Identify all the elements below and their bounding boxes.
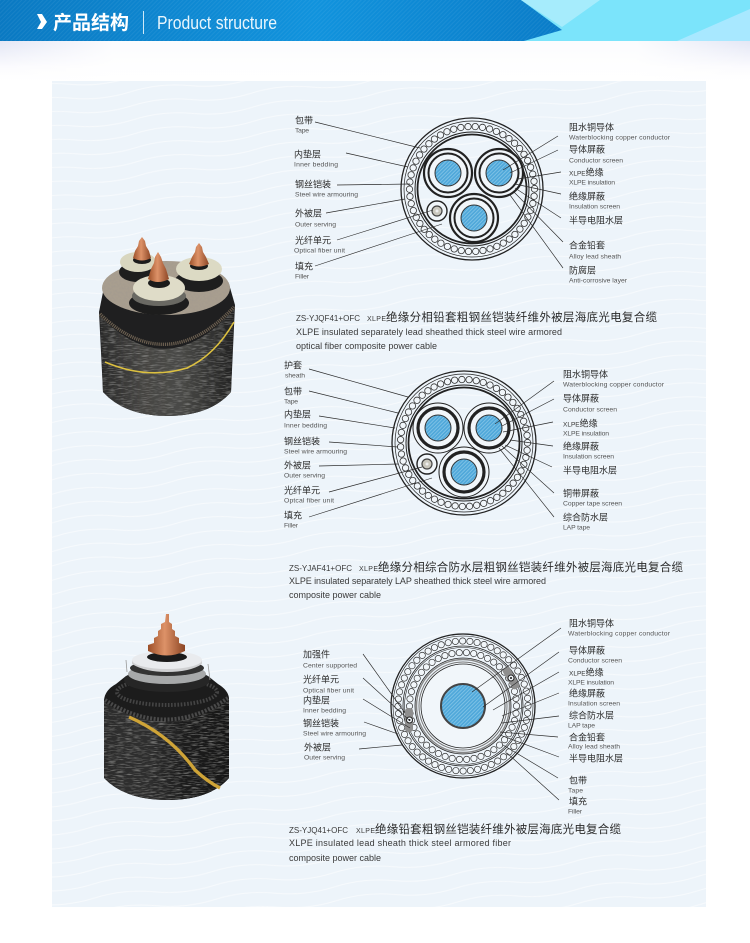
- header banner: [0, 0, 750, 41]
- diagram 3 caption: XLPE: [356, 828, 375, 835]
- heading: Chinese: 产品结构: [53, 12, 129, 34]
- diagram 2 left labels: 内垫层: [284, 408, 311, 420]
- diagram 3 left labels: 加强件: [303, 648, 330, 660]
- diagram 3 leader lines: [359, 628, 561, 800]
- diagram 2 left labels: 钢丝铠装: [284, 436, 320, 446]
- diagram 1 right labels: 半导电阻水层: [569, 214, 623, 226]
- diagram 1 left labels: 内垫层: [294, 148, 321, 160]
- diagram 2 caption: ZS-YJAF41+OFC: [289, 564, 352, 573]
- diagram 2 left labels: [284, 360, 347, 530]
- diagram 1 right labels: Anti-corrosive layer: [569, 278, 628, 284]
- diagram 1 right labels: XLPE insulation: [569, 180, 615, 186]
- diagram 3 left labels: Center supported: [303, 662, 357, 670]
- diagram 3 right labels: Conductor screen: [568, 658, 622, 664]
- diagram 1 left labels: Outer serving: [295, 222, 336, 228]
- diagram 3 left labels: [303, 648, 366, 762]
- copper conductor: [148, 614, 185, 656]
- diagram 1 right labels: 绝缘屏蔽: [569, 190, 605, 202]
- optical fiber unit right: [502, 666, 520, 690]
- diagram 1 left labels: Tape: [295, 128, 309, 134]
- diagram 3 right labels: 绝缘屏蔽: [569, 688, 605, 698]
- diagram 2 leader lines: [309, 369, 554, 517]
- diagram 2 left labels: 光纤单元: [284, 484, 320, 496]
- diagram 2 left labels: Inner bedding: [284, 422, 327, 430]
- diagram 1 right labels: Insulation screen: [569, 204, 620, 210]
- photo: single-core cable: [104, 614, 229, 800]
- diagram 2 right labels: 阻水铜导体: [563, 368, 608, 380]
- diagram 2 right labels: Conductor screen: [563, 406, 617, 414]
- diagram 3 caption: XLPE insulated lead sheath thick steel armored fiber: [289, 838, 511, 848]
- diagram 1 right labels: 合金铅套: [569, 240, 605, 250]
- photo: three-core cable: [99, 237, 235, 416]
- left core: [119, 237, 157, 282]
- diagram 2 right labels: XLPE绝缘: [563, 418, 598, 428]
- front core: [129, 252, 189, 315]
- diagram 3 caption: [289, 822, 622, 863]
- diagram 3 right labels: XLPE绝缘: [569, 666, 604, 678]
- diagram 2 caption: composite power cable: [289, 590, 381, 600]
- diagram 1 right labels: 阻水铜导体: [569, 122, 614, 132]
- diagram 1 caption: ZS-YJQF41+OFC: [296, 314, 360, 323]
- diagram 1 left labels: 钢丝铠装: [295, 178, 331, 190]
- diagram 2 right labels: 铜带屏蔽: [563, 488, 599, 498]
- diagram 3 left labels: 钢丝铠装: [303, 718, 339, 728]
- diagram 2 left labels: 填充: [284, 510, 302, 520]
- diagram 1 right labels: 导体屏蔽: [569, 144, 605, 154]
- core 1: [413, 403, 463, 453]
- diagram 1 left labels: Filler: [295, 274, 310, 280]
- diagram 3 left labels: 光纤单元: [303, 674, 339, 684]
- diagram 2 right labels: LAP tape: [563, 524, 590, 532]
- core 1: [424, 149, 472, 197]
- header shadow gradient: [0, 41, 750, 81]
- diagram 2: cross-section: [392, 371, 536, 515]
- diagram 3 caption: composite power cable: [289, 853, 381, 863]
- diagram 1 right labels: Alloy lead sheath: [569, 254, 621, 260]
- diagram 2 caption: [289, 560, 684, 600]
- diagram 3 right labels: Filler: [568, 808, 583, 816]
- diagram 3 left labels: 外被层: [304, 742, 331, 752]
- content panel background: [52, 81, 706, 907]
- diagram 2 right labels: Insulation screen: [563, 454, 614, 460]
- core 3: [450, 194, 498, 242]
- optical fiber unit left: [405, 708, 413, 732]
- diagram 3 right labels: Alloy lead sheath: [568, 744, 620, 750]
- diagram 1 right labels: Conductor screen: [569, 158, 623, 164]
- diagram 1 left labels: Optical fiber unit: [294, 248, 345, 254]
- optical fiber unit: [417, 454, 437, 474]
- diagram 1 right labels: Waterblocking copper conductor: [569, 134, 671, 142]
- diagram 2 left labels: Filler: [284, 522, 299, 530]
- diagram 1 left labels: 填充: [295, 260, 313, 272]
- diagram 2 left labels: Optcal fiber unit: [284, 498, 334, 504]
- diagram 2 caption: XLPE: [359, 566, 378, 573]
- core 3: [439, 447, 489, 497]
- diagram 3 right labels: [568, 618, 671, 816]
- diagram 3: cross-section: [391, 634, 535, 778]
- diagram 1 caption: 绝缘分相铅套粗钢丝铠装纤维外被层海底光电复合缆: [386, 310, 658, 324]
- diagram 3 right labels: 半导电阻水层: [569, 752, 623, 764]
- diagram 1: cross-section: [401, 118, 543, 260]
- diagram 3 right labels: XLPE insulation: [568, 680, 614, 686]
- diagram 3 left labels: Inner bedding: [303, 708, 346, 714]
- diagram 3 right labels: 阻水铜导体: [569, 618, 614, 628]
- conductor: [441, 684, 485, 728]
- diagram 3 caption: 绝缘铅套粗钢丝铠装纤维外被层海底光电复合缆: [375, 822, 622, 836]
- diagram 2 right labels: 绝缘屏蔽: [563, 440, 599, 452]
- heading: English: Product structure: [157, 13, 277, 33]
- core 2: [475, 149, 523, 197]
- diagram 1 right labels: 防腐层: [569, 264, 596, 276]
- diagram 2 left labels: sheath: [285, 372, 305, 380]
- diagram 1 caption: XLPE insulated separately lead sheathed thick steel wire armored: [296, 327, 562, 337]
- diagram 3 caption: ZS-YJQ41+OFC: [289, 826, 348, 835]
- diagram 3 right labels: Insulation screen: [568, 700, 620, 708]
- diagram 1 caption: XLPE: [367, 316, 386, 323]
- diagram 3 left labels: Steel wire armouring: [303, 730, 366, 738]
- diagram 3 left labels: 内垫层: [303, 694, 330, 706]
- diagram 3 right labels: Tape: [568, 788, 583, 794]
- diagram 2 caption: XLPE insulated separately LAP sheathed thick steel wire armored: [289, 576, 546, 586]
- diagram 1 caption: optical fiber composite power cable: [296, 341, 437, 351]
- diagram 1 leader lines: [315, 122, 563, 268]
- diagram 2 left labels: 护套: [284, 360, 302, 370]
- diagram 1 left labels: Inner bedding: [294, 162, 338, 168]
- diagram 1 left labels: 光纤单元: [295, 234, 331, 246]
- diagram 3 right labels: 综合防水层: [569, 710, 614, 720]
- diagram 2 left labels: Outer serving: [284, 472, 325, 480]
- diagram 2 left labels: Steel wire armouring: [284, 448, 347, 456]
- diagram 1 caption: [296, 310, 658, 351]
- diagram 1 left labels: 外被层: [295, 208, 322, 218]
- diagram 3 right labels: 合金铅套: [569, 732, 605, 742]
- diagram 3 right labels: LAP tape: [568, 722, 595, 730]
- diagram 2 left labels: 外被层: [284, 460, 311, 470]
- diagram 2 right labels: Copper tape screen: [563, 500, 622, 508]
- core 2: [464, 403, 514, 453]
- diagram 1 left labels: Steel wire armouring: [295, 192, 358, 198]
- diagram 1 left labels: [294, 114, 358, 280]
- diagram 2 left labels: Tape: [284, 398, 298, 406]
- diagram 1 right labels: [569, 122, 671, 284]
- diagram 1 right labels: XLPE绝缘: [569, 166, 604, 178]
- white insulation disc: [132, 651, 202, 672]
- diagram 2 caption: 绝缘分相综合防水层粗钢丝铠装纤维外被层海底光电复合缆: [378, 560, 684, 574]
- right core: [175, 243, 223, 292]
- diagram 2 right labels: 导体屏蔽: [563, 392, 599, 404]
- diagram 3 right labels: 导体屏蔽: [569, 644, 605, 656]
- diagram 3 left labels: Optical fiber unit: [303, 688, 354, 694]
- diagram 3 right labels: Waterblocking copper conductor: [568, 630, 671, 638]
- optical fiber unit: [427, 201, 447, 221]
- diagram 3 left labels: Outer serving: [304, 754, 345, 762]
- diagram 3 right labels: 填充: [569, 796, 587, 806]
- diagram 2 right labels: 综合防水层: [563, 512, 608, 522]
- diagram 2 right labels: XLPE insulation: [563, 430, 609, 438]
- diagram 2 left labels: 包带: [284, 386, 302, 396]
- icon: chevron arrow: [37, 14, 47, 29]
- diagram 3 right labels: 包带: [569, 774, 587, 786]
- diagram 2 right labels: Waterblocking copper conductor: [563, 382, 665, 388]
- diagram 2 right labels: [563, 368, 665, 532]
- diagram 2 right labels: 半导电阻水层: [563, 464, 617, 476]
- diagram 1 left labels: 包带: [295, 114, 313, 126]
